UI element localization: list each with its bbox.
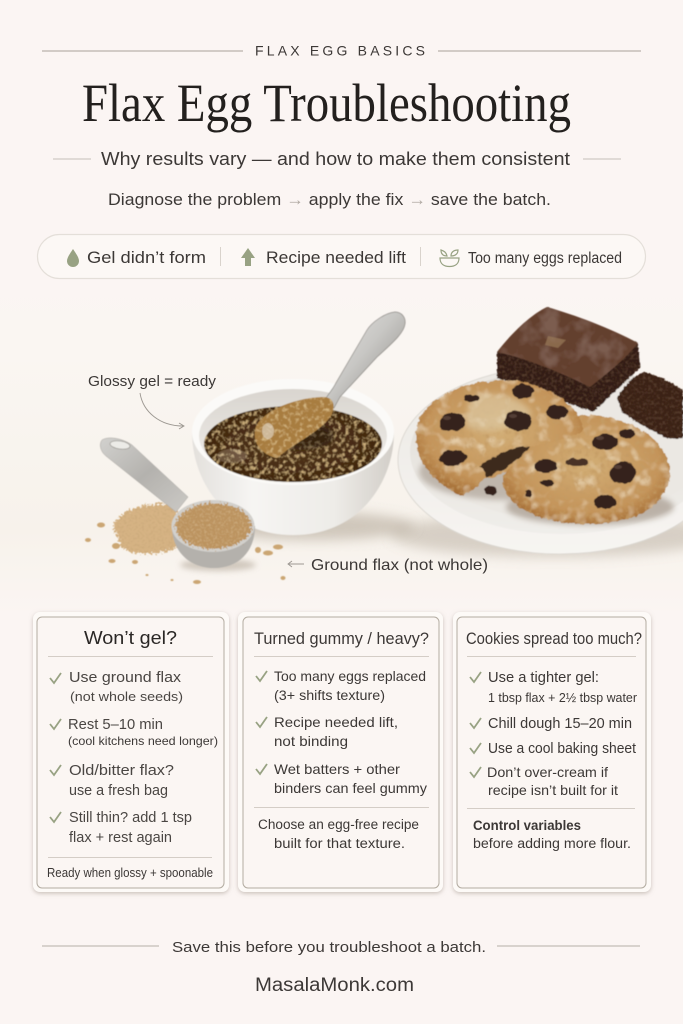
icon: water drop	[67, 249, 79, 267]
checklist: Use a cool baking sheet	[488, 741, 636, 757]
checklist: binders can feel gummy	[274, 780, 427, 796]
checklist: recipe isn’t built for it	[488, 782, 618, 798]
checklist: Use ground flax	[69, 669, 182, 686]
footer note: before adding more flour.	[473, 836, 631, 851]
footer note	[473, 818, 631, 851]
serving spoon	[255, 312, 405, 458]
checklist: Recipe needed lift,	[274, 714, 398, 730]
plate with baked goods	[390, 307, 683, 557]
checklist: Use a tighter gel:	[488, 670, 599, 686]
measuring spoon with ground flax	[85, 438, 286, 584]
checklist	[256, 668, 427, 796]
flax pile	[113, 504, 182, 554]
panel: cookies spread too much	[453, 612, 651, 892]
footer note: Control variables	[473, 818, 581, 833]
checklist: Still thin? add 1 tsp	[69, 809, 192, 826]
scattered flax	[85, 522, 286, 584]
checklist: Chill dough 15–20 min	[488, 716, 632, 732]
checklist: Rest 5–10 min	[68, 716, 163, 733]
checklist: not binding	[274, 733, 348, 749]
checklist: (cool kitchens need longer)	[68, 734, 218, 748]
heading: Turned gummy / heavy?	[254, 630, 429, 648]
eyebrow heading: FLAX EGG BASICS	[255, 42, 425, 58]
label: gel didn't form: Gel didn’t form	[87, 248, 206, 267]
brownie large	[497, 307, 640, 412]
chip highlights	[443, 414, 622, 469]
heading: Cookies spread too much?	[466, 630, 642, 648]
photo: flax bowl, measuring spoon, cookies and brownies	[85, 307, 683, 584]
brand: MasalaMonk.com	[255, 975, 414, 996]
footer note: built for that texture.	[274, 836, 405, 851]
subtitle: Why results vary — and how to make them consistent	[101, 148, 570, 169]
heading: Won’t gel?	[84, 628, 177, 648]
callout: glossy gel	[88, 373, 217, 429]
checklist	[470, 670, 637, 798]
checklist: Old/bitter flax?	[69, 762, 174, 779]
tagline: Diagnose the problem → apply the fix → save the batch.	[108, 191, 551, 209]
checklist: Don’t over-cream if	[487, 764, 608, 780]
checklist: flax + rest again	[69, 829, 172, 846]
pill: three common causes	[38, 234, 646, 278]
label: too many eggs replaced: Too many eggs replaced	[468, 250, 622, 267]
checklist: 1 tbsp flax + 2½ tbsp water	[488, 691, 637, 705]
callout: glossy gel: Glossy gel = ready	[88, 373, 217, 390]
label: recipe needed lift: Recipe needed lift	[266, 248, 406, 267]
checklist: Wet batters + other	[274, 761, 400, 777]
icon: bowl with sprout	[440, 250, 459, 266]
callout: ground flax: Ground flax (not whole)	[311, 557, 488, 574]
flax gel bowl	[192, 312, 415, 540]
footer note: Ready when glossy + spoonable	[47, 866, 213, 880]
footer call to action: Save this before you troubleshoot a batch.	[172, 939, 486, 956]
brownie small	[617, 372, 683, 439]
checklist: Too many eggs replaced	[274, 668, 426, 684]
panel: won't gel	[33, 612, 229, 892]
icon: up arrow	[241, 248, 255, 266]
checklist: (3+ shifts texture)	[274, 688, 385, 703]
checklist: (not whole seeds)	[70, 689, 183, 704]
checklist	[50, 669, 218, 846]
footer note	[258, 817, 419, 851]
title: Flax Egg Troubleshooting	[82, 73, 571, 133]
footer note: Choose an egg-free recipe	[258, 817, 419, 832]
flax gel	[204, 406, 382, 482]
checklist: use a fresh bag	[69, 782, 168, 799]
panel: turned gummy or heavy	[238, 612, 443, 892]
cookie left, broken	[416, 380, 622, 496]
cookie right	[503, 415, 670, 524]
